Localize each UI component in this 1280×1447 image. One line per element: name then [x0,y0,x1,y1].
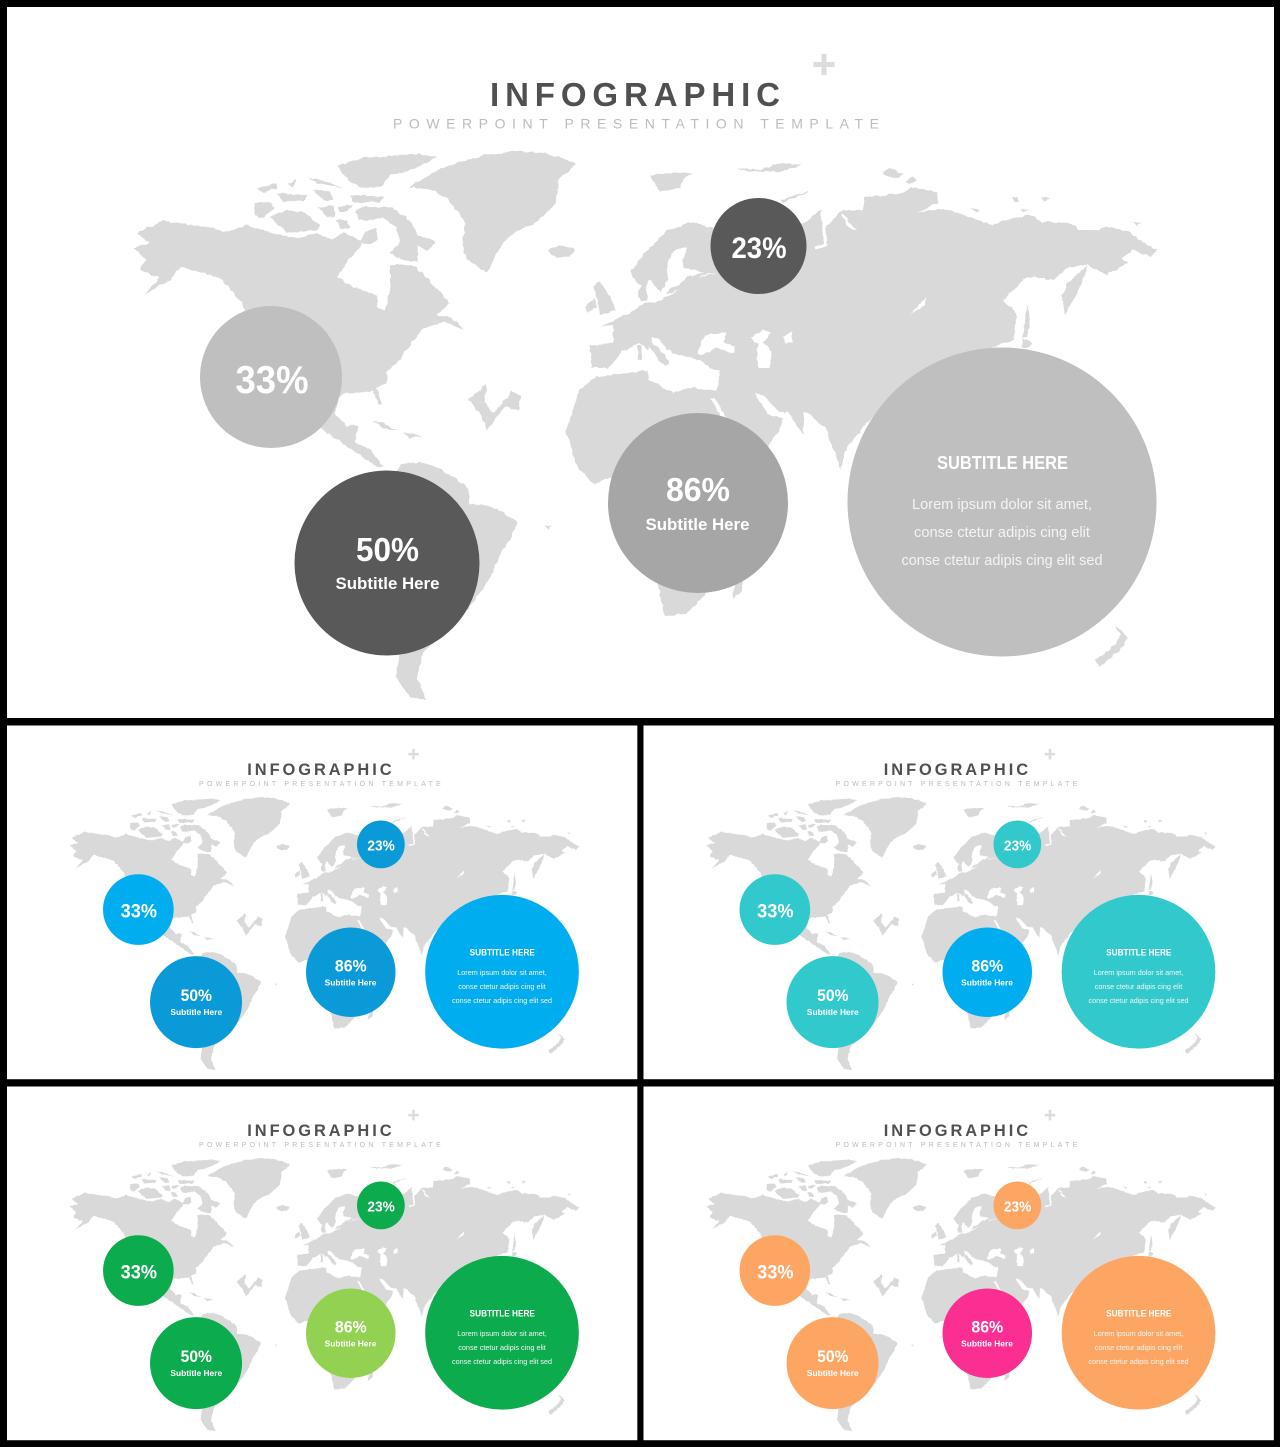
bubble: 23% [357,821,405,868]
bubble: 33% [740,1235,810,1306]
bubble: description [1062,1256,1215,1410]
subtitle: POWERPOINT PRESENTATION TEMPLATE [836,781,1078,788]
world map [706,1158,1216,1431]
bubble: 50%: 50% [181,987,212,1005]
bubble: 86% [306,1288,396,1378]
bubble: description: conse ctetur adipis cing elit sed [1089,996,1189,1005]
bubble: 33% [103,1235,174,1306]
icon: plus mark [1045,1110,1055,1120]
bubble: 50%: Subtitle Here [807,1008,859,1017]
bubble: description [425,895,579,1049]
subtitle: POWERPOINT PRESENTATION TEMPLATE [199,781,441,788]
bubble: 86%: 86% [335,957,367,975]
bubble: 86%: 86% [335,1318,367,1336]
bubble: description: Lorem ipsum dolor sit amet, [457,968,547,977]
bubble: description: SUBTITLE HERE [1106,947,1171,957]
bubble: 23%: 23% [732,232,786,265]
bubble: description: Lorem ipsum dolor sit amet, [912,497,1092,513]
title: INFOGRAPHIC [247,761,392,779]
bubble: 33%: 33% [121,1262,157,1284]
bubble: 50%: Subtitle Here [170,1008,223,1017]
bubble: 23% [993,1182,1041,1229]
bubble: 86% [942,927,1032,1017]
bubble: 50% [150,956,242,1048]
bubble: 50%: 50% [356,531,419,568]
icon: plus mark [408,749,419,759]
bubble: description: SUBTITLE HERE [470,947,535,957]
bubble: description: conse ctetur adipis cing elit sed [902,553,1102,569]
bubble: 86%: 86% [971,1318,1004,1336]
bubble: description: conse ctetur adipis cing elit [1095,982,1182,991]
bubble: description: Lorem ipsum dolor sit amet, [1094,1329,1183,1338]
bubble: 23%: 23% [1004,1198,1031,1215]
bubble: 86%: 86% [666,471,730,508]
bubble: 50%: 50% [817,1348,849,1366]
bubble: 86%: Subtitle Here [646,516,750,534]
bubble: 86%: Subtitle Here [961,979,1013,988]
bubble: 33%: 33% [757,901,793,923]
bubble: 23% [993,821,1041,868]
panel: grey world map slide [7,7,1274,718]
bubble: description: conse ctetur adipis cing elit sed [452,1357,552,1366]
bubble: 50% [150,1317,242,1409]
bubble: description: conse ctetur adipis cing elit sed [452,996,552,1005]
panel: orange world map slide [644,1086,1274,1440]
bubble: 33% [200,306,342,448]
subtitle: POWERPOINT PRESENTATION TEMPLATE [199,1142,441,1149]
bubble: 86% [306,927,396,1017]
world map [70,797,580,1070]
bubble: description [1062,895,1215,1049]
bubble: description: conse ctetur adipis cing elit sed [1089,1357,1189,1366]
bubble: 86%: Subtitle Here [325,979,377,988]
bubble: description [425,1256,579,1410]
bubble: 33% [103,874,174,945]
bubble: 23% [710,198,806,294]
title: INFOGRAPHIC [490,76,780,113]
bubble: 50%: 50% [817,987,849,1005]
bubble: 23%: 23% [1004,837,1031,854]
bubble: description: SUBTITLE HERE [937,453,1068,473]
bubble: 50%: Subtitle Here [807,1369,859,1378]
bubble: description: SUBTITLE HERE [470,1308,535,1318]
bubble: 50%: Subtitle Here [336,575,440,593]
bubble: description: conse ctetur adipis cing elit [1095,1343,1182,1352]
bubble: 33% [740,874,810,945]
bubble: 50% [294,470,480,656]
bubble: 50%: 50% [181,1348,212,1366]
subtitle: POWERPOINT PRESENTATION TEMPLATE [393,116,879,132]
bubble: 50% [787,956,879,1048]
bubble: description: Lorem ipsum dolor sit amet, [1094,968,1183,977]
subtitle: POWERPOINT PRESENTATION TEMPLATE [836,1142,1078,1149]
icon: plus mark [408,1110,419,1120]
bubble: 50% [787,1317,879,1409]
world map [706,797,1216,1070]
bubble: 23% [357,1182,405,1229]
world map [133,151,1158,700]
bubble: description [848,348,1156,656]
icon: plus mark [814,54,834,75]
title: INFOGRAPHIC [884,1122,1028,1140]
bubble: 86%: Subtitle Here [325,1340,377,1349]
bubble: 33%: 33% [757,1262,793,1284]
bubble: 86% [608,413,788,593]
panel: blue world map slide [7,726,637,1079]
bubble: 23%: 23% [367,1198,395,1215]
panel: teal world map slide [644,726,1274,1079]
bubble: 33%: 33% [236,359,308,402]
bubble: description: Lorem ipsum dolor sit amet, [457,1329,547,1338]
bubble: 86%: 86% [971,957,1004,975]
title: INFOGRAPHIC [884,761,1028,779]
panel: green world map slide [7,1086,637,1440]
bubble: 23%: 23% [367,837,395,854]
title: INFOGRAPHIC [247,1122,392,1140]
icon: plus mark [1045,749,1055,759]
bubble: description: conse ctetur adipis cing elit [914,525,1090,541]
world map [70,1158,580,1431]
bubble: 33%: 33% [121,901,157,923]
bubble: 86%: Subtitle Here [961,1340,1013,1349]
bubble: 50%: Subtitle Here [170,1369,223,1378]
bubble: 86% [942,1288,1032,1378]
bubble: description: SUBTITLE HERE [1106,1308,1171,1318]
bubble: description: conse ctetur adipis cing elit [458,1343,546,1352]
bubble: description: conse ctetur adipis cing elit [458,982,546,991]
